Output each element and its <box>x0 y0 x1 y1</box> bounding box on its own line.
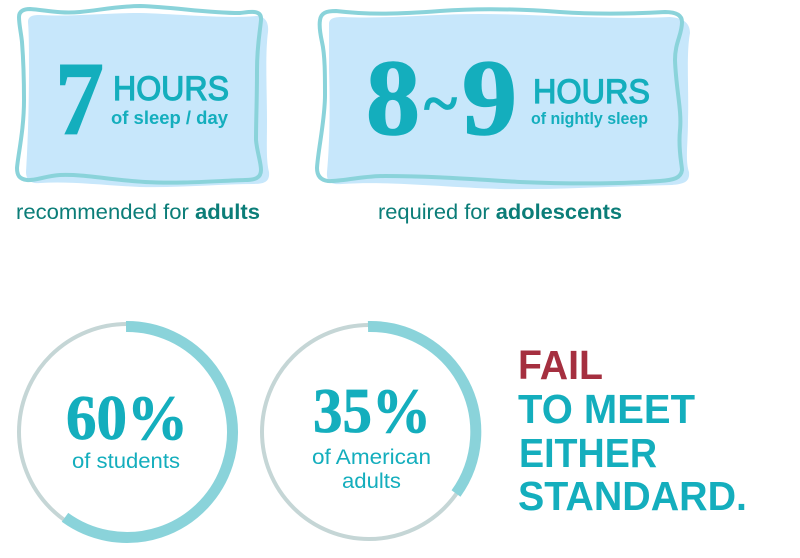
pillow outline: adolescent <box>317 9 682 183</box>
label: of American <box>312 446 431 469</box>
label: of students <box>72 450 180 473</box>
big number 7: 7 <box>55 40 104 157</box>
donut: 60% of students <box>19 324 235 540</box>
of nightly sleep: of nightly sleep <box>531 109 648 128</box>
HOURS label: HOURS <box>533 73 650 111</box>
label: adults <box>342 470 401 493</box>
big number 8~9: 9 <box>462 39 517 158</box>
of sleep / day: of sleep / day <box>111 108 228 128</box>
caption: required for adolescents: required for adolescents <box>378 201 622 224</box>
track ring <box>262 325 476 539</box>
progress arc 60% <box>65 326 233 537</box>
big number 8~9 <box>366 39 517 158</box>
headline: fail to meet either standard: EITHER <box>519 430 657 476</box>
value: 35% <box>313 376 431 446</box>
HOURS label: HOURS <box>113 70 229 108</box>
progress arc 35% <box>368 326 476 494</box>
track ring <box>19 324 235 540</box>
label <box>312 446 431 493</box>
headline: fail to meet either standard: TO MEET <box>518 386 695 432</box>
panel: adolescent pillow <box>317 9 690 189</box>
pillow fill: adolescent <box>327 14 690 189</box>
panel: adult pillow <box>17 6 269 187</box>
caption: recommended for adults: recommended for adults <box>16 201 260 224</box>
donut: 35% of American adults <box>262 325 476 539</box>
value: 60% <box>66 383 188 453</box>
pillow outline: adult <box>17 6 261 183</box>
pillow fill: adult <box>26 13 269 187</box>
headline: fail to meet either standard: STANDARD. <box>518 473 747 519</box>
big number 8~9: ~ <box>424 70 457 138</box>
headline: fail to meet either standard <box>518 342 747 519</box>
big number 8~9: 8 <box>366 39 420 158</box>
headline: fail to meet either standard: FAIL <box>518 342 603 388</box>
